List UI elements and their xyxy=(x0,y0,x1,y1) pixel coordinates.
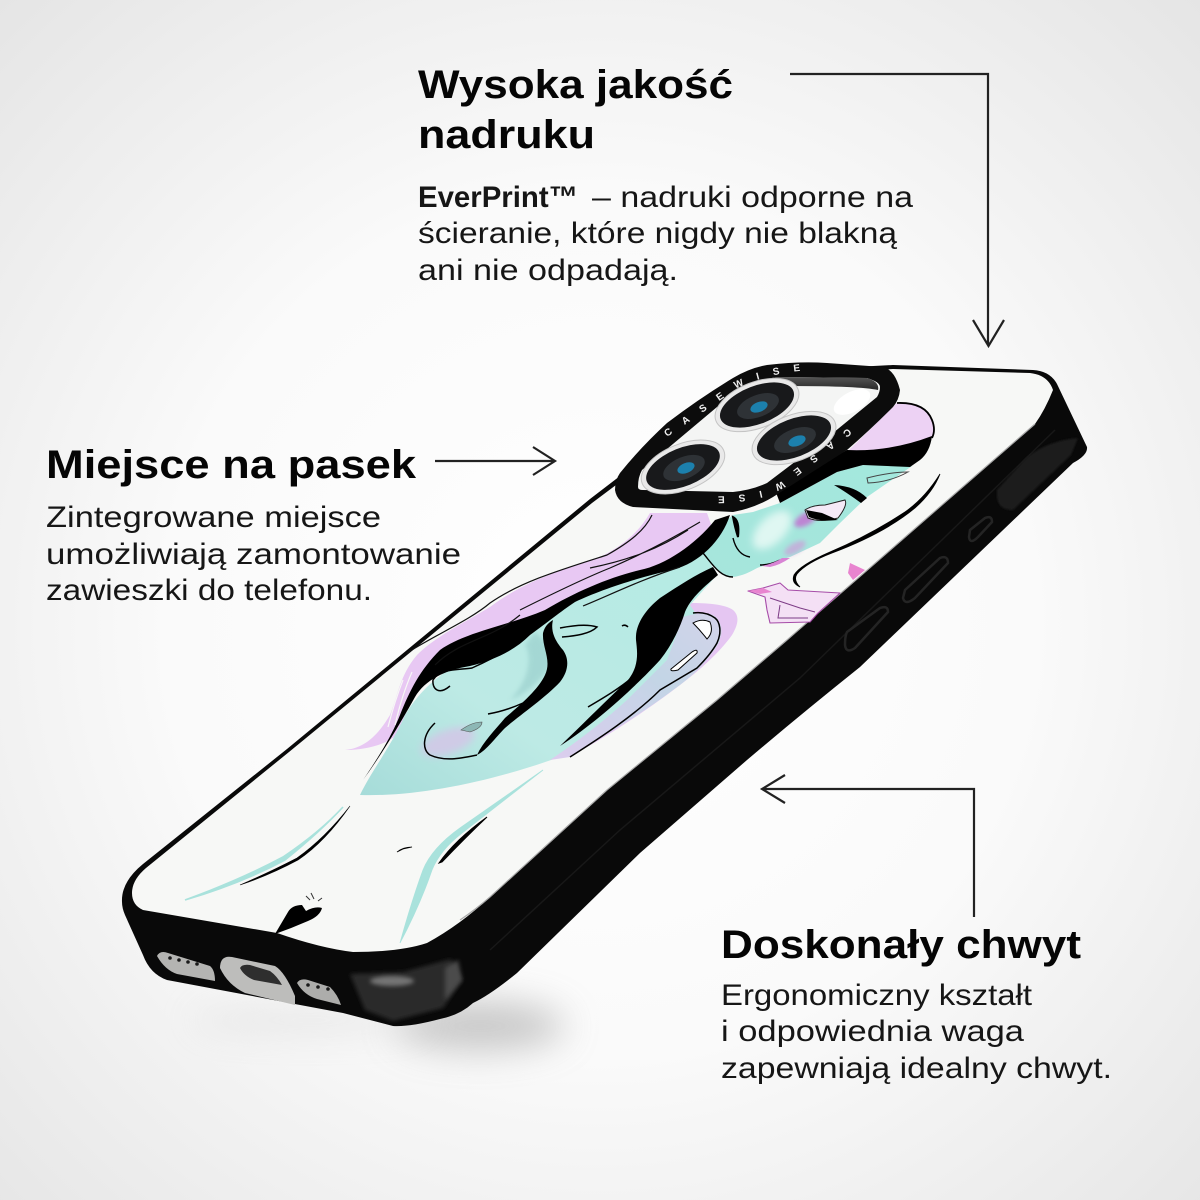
finger lines xyxy=(770,598,815,618)
belly shade xyxy=(550,613,722,760)
hair cap outline xyxy=(897,403,934,438)
eye blush xyxy=(792,507,820,531)
chin and neck lines xyxy=(733,517,738,537)
torso lines xyxy=(425,613,720,759)
camera ring xyxy=(615,362,900,512)
phone case xyxy=(122,365,1087,1026)
head hair band xyxy=(775,436,932,503)
heading: nadruku xyxy=(418,113,595,157)
hair strands xyxy=(407,515,700,665)
right hip ink xyxy=(439,817,487,863)
right black hair xyxy=(560,567,718,746)
torso xyxy=(360,545,720,795)
fingernail and upper finger xyxy=(748,563,865,594)
right hip teal line xyxy=(400,770,543,943)
corner highlight xyxy=(350,959,462,1021)
flash glint xyxy=(830,384,874,420)
artwork: figure xyxy=(185,403,940,943)
head and neck xyxy=(680,465,912,577)
ring text top: CASEWISE xyxy=(664,364,800,436)
belly mark xyxy=(622,625,628,627)
side buttons xyxy=(845,517,992,650)
pink hair xyxy=(345,513,713,750)
glass top shadow xyxy=(747,377,878,394)
eye pupil xyxy=(806,510,838,521)
left hip lines xyxy=(185,807,343,900)
jaw curve xyxy=(703,538,780,577)
fold shade xyxy=(510,632,552,700)
callout: strap slot xyxy=(46,443,555,607)
charging port xyxy=(220,957,295,1005)
ring text bottom: CASEWISE xyxy=(718,429,851,504)
lens top xyxy=(708,368,806,442)
heart xyxy=(275,905,322,934)
body text: umożliwiają zamontowanie xyxy=(46,538,461,571)
body text: zapewniają idealny chwyt. xyxy=(721,1052,1112,1085)
lips xyxy=(762,558,790,567)
back panel xyxy=(132,369,1053,952)
pink wisps xyxy=(388,672,412,727)
panel bevel xyxy=(460,424,1035,920)
arrow to phone top xyxy=(790,74,1004,346)
body text: zawieszki do telefonu. xyxy=(46,574,372,607)
body text: EverPrint™ xyxy=(418,181,578,214)
heading: Doskonały chwyt xyxy=(721,923,1081,967)
body text: Zintegrowane miejsce xyxy=(46,501,381,534)
left hip ink xyxy=(240,806,350,885)
arrow to phone side xyxy=(762,775,974,917)
eye xyxy=(805,500,846,520)
callout: grip xyxy=(721,775,1112,1085)
phone drop shadow xyxy=(190,1002,565,1050)
camera module xyxy=(615,362,900,512)
collar highlights xyxy=(671,620,711,671)
heading: Miejsce na pasek xyxy=(46,443,417,487)
brow xyxy=(834,485,867,503)
body text: i odpowiednia waga xyxy=(721,1015,1024,1048)
case body xyxy=(122,365,1087,1026)
arrow to strap slot xyxy=(435,447,555,475)
body text: ścieranie, które nigdy nie blakną xyxy=(418,217,897,250)
navel xyxy=(397,847,412,852)
upper side highlight xyxy=(997,438,1078,510)
lens left xyxy=(634,429,732,505)
lavender belly halo xyxy=(573,603,737,755)
upper black hair xyxy=(363,515,730,780)
left speaker xyxy=(157,952,215,981)
heart sparks xyxy=(306,893,322,901)
side rail line xyxy=(490,430,1055,950)
pink hair cap xyxy=(847,403,934,458)
long face line xyxy=(793,474,940,587)
hand xyxy=(748,583,840,623)
right speaker xyxy=(297,979,341,1005)
nipple xyxy=(461,722,482,732)
mouth blush xyxy=(782,538,808,558)
callout: print quality xyxy=(418,63,1004,346)
camera glass xyxy=(638,377,880,492)
heading: Wysoka jakość xyxy=(418,63,733,107)
s-curve hair xyxy=(477,620,567,755)
speaker holes xyxy=(168,956,330,991)
cheek highlight xyxy=(746,504,798,556)
breast shade xyxy=(418,721,478,763)
body text: ani nie odpadają. xyxy=(418,254,678,287)
body text: Ergonomiczny kształt xyxy=(721,979,1033,1012)
body text: – nadruki odporne na xyxy=(592,181,913,214)
lens right xyxy=(745,401,843,475)
ear line xyxy=(867,472,908,483)
